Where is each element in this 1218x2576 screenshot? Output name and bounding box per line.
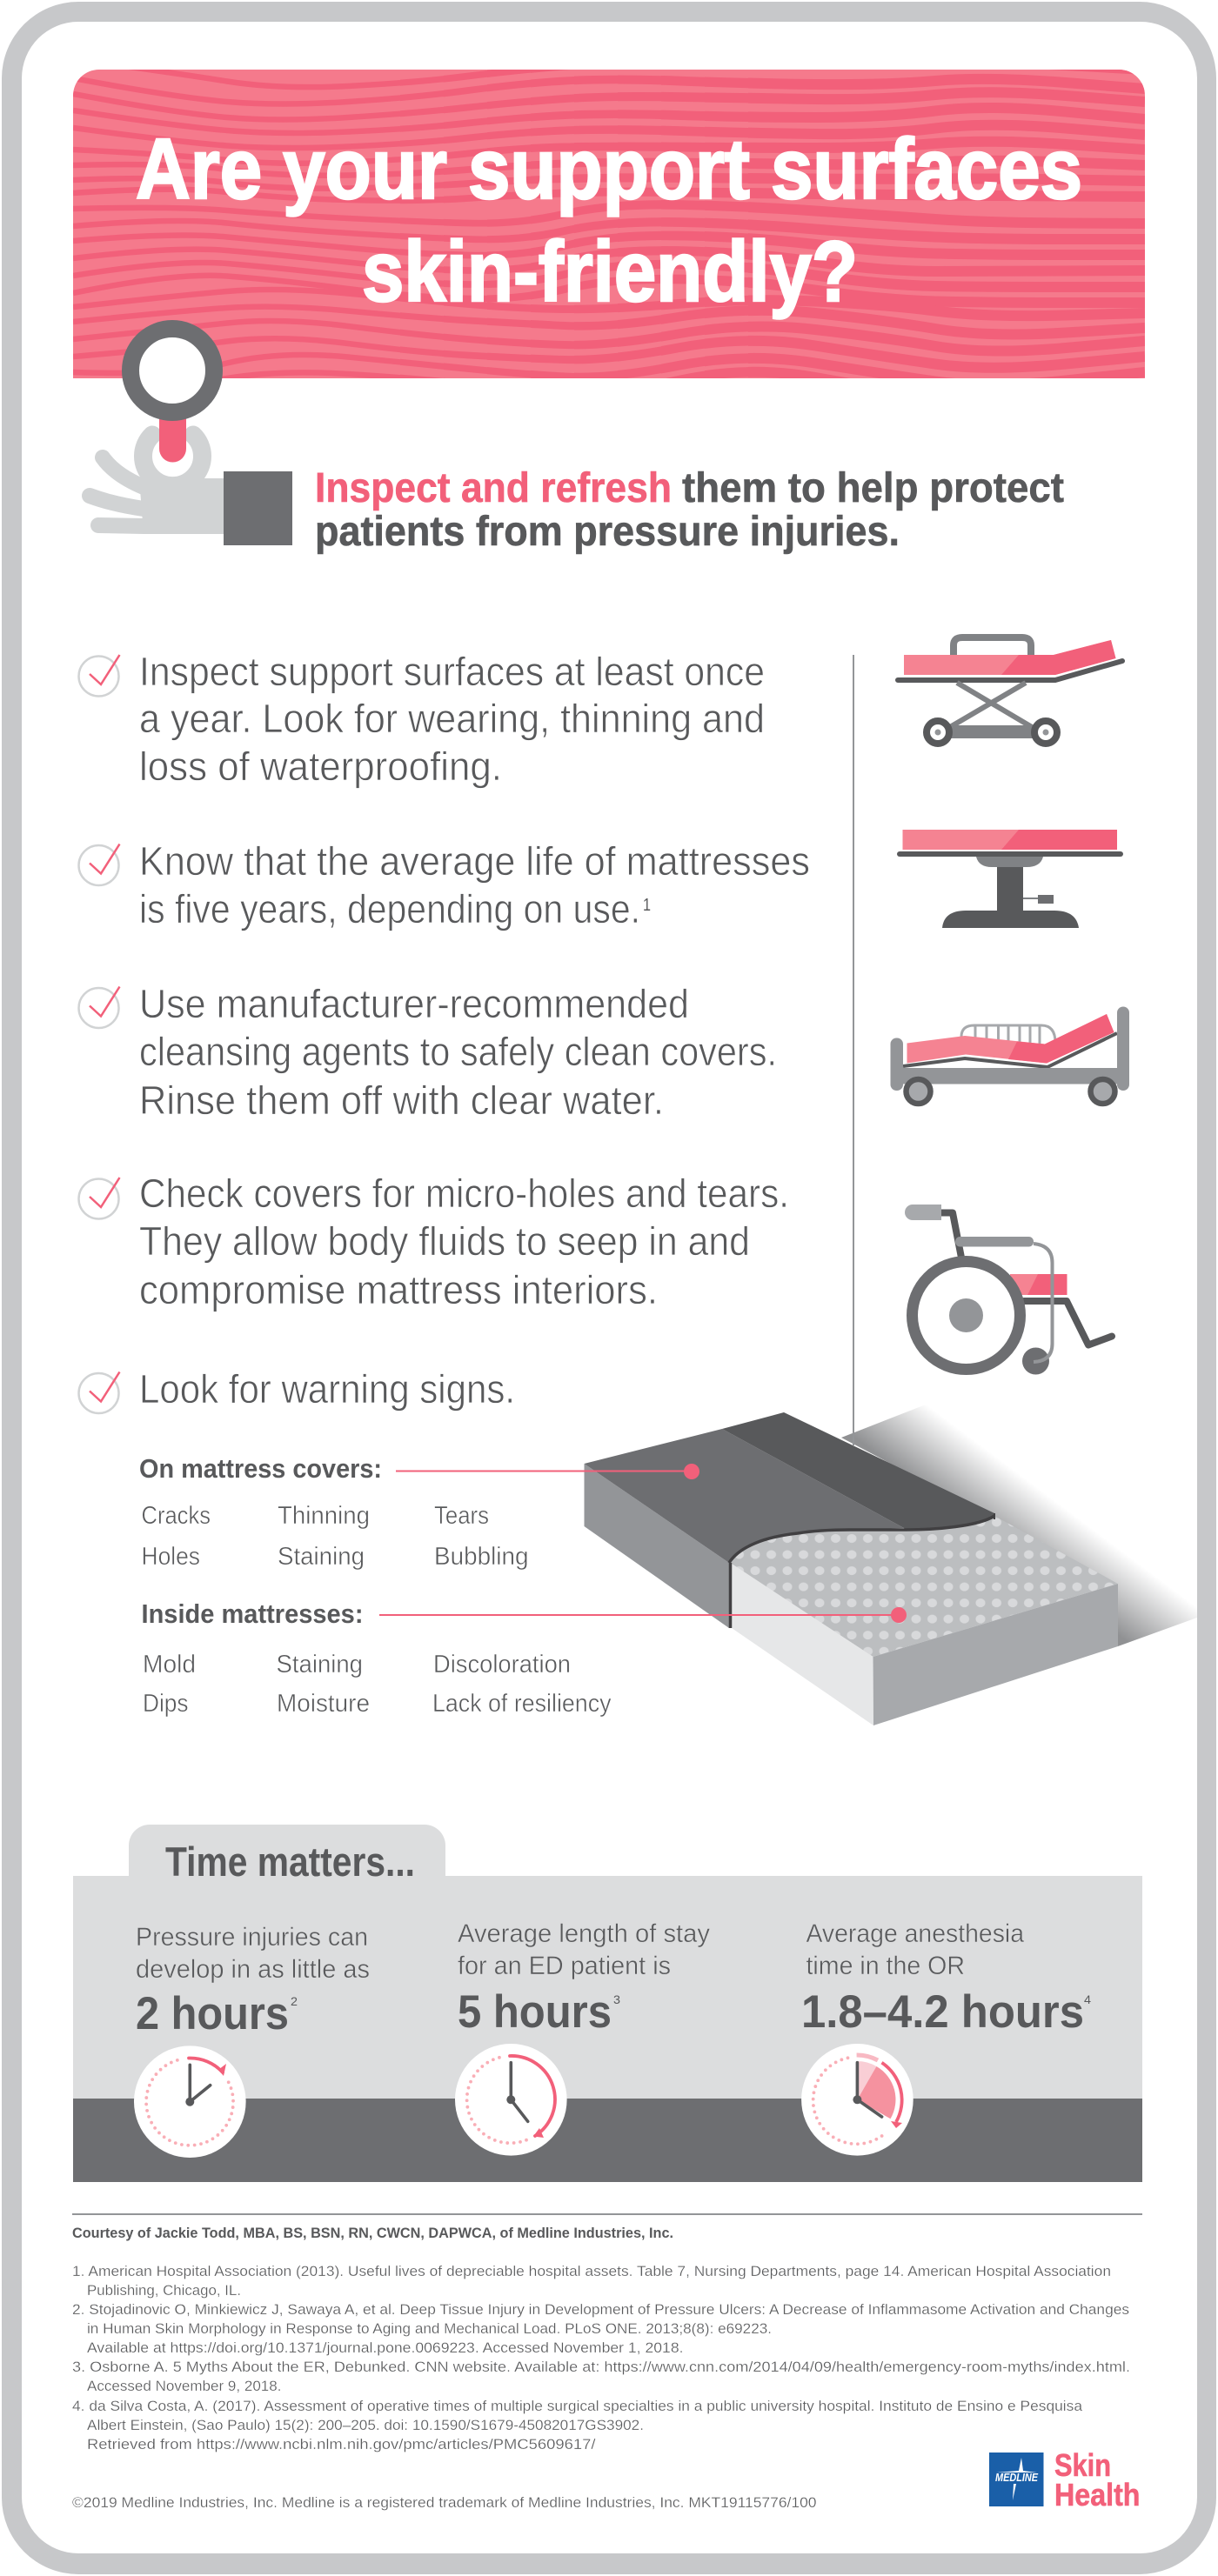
icon: hospital bed bbox=[891, 1007, 1129, 1104]
stat: 2 hours bbox=[136, 1923, 370, 2039]
icon: wheelchair bbox=[905, 1205, 1112, 1374]
stat: 1.8-4.2 hours: time in the OR bbox=[806, 1952, 965, 1980]
callout: on mattress covers: Staining bbox=[278, 1543, 365, 1571]
checklist item 2: is five years, depending on use. bbox=[139, 886, 640, 931]
callout: on mattress covers: Cracks bbox=[141, 1502, 211, 1530]
logo: Medline bbox=[989, 2453, 1044, 2506]
copyright: ©2019 Medline Industries, Inc. Medline is a registered trademark of Medline Industries, Inc. MKT19115776/100 bbox=[72, 2494, 816, 2511]
checklist item 4: Check covers for micro-holes and tears. bbox=[139, 1171, 789, 1216]
references: 4. da Silva Costa, A. (2017). Assessment of operative times of multiple surgical specialties in a public university hospital. Instituto de Ensino e Pesquisa bbox=[72, 2398, 1083, 2414]
heading: time matters: Time matters... bbox=[165, 1839, 415, 1885]
divider above references bbox=[72, 2213, 1142, 2215]
callout: inside mattresses: Moisture bbox=[277, 1690, 370, 1718]
callout: inside mattresses: Discoloration bbox=[433, 1651, 571, 1678]
callout: inside mattresses: Mold bbox=[143, 1651, 196, 1678]
references: in Human Skin Morphology in Response to Aging and Mechanical Load. PLoS ONE. 2013;8(8): e69223. bbox=[87, 2320, 772, 2337]
stat: 1.8-4.2 hours: 1.8–4.2 hours bbox=[801, 1986, 1084, 2038]
references: 1. American Hospital Association (2013). Useful lives of depreciable hospital assets. Table 7, Nursing Departments, page 14. American Hospital Association bbox=[72, 2263, 1111, 2279]
checklist item 2: 1 bbox=[643, 896, 651, 915]
references bbox=[72, 2263, 1130, 2453]
icon: clock 5 hours bbox=[455, 2044, 567, 2156]
courtesy line: Courtesy of Jackie Todd, MBA, BS, BSN, RN, CWCN, DAPWCA, of Medline Industries, Inc. bbox=[72, 2225, 673, 2241]
mattress illustration bbox=[585, 1405, 1197, 1725]
vertical divider line bbox=[853, 655, 854, 1445]
checklist item 3: cleansing agents to safely clean covers. bbox=[139, 1029, 777, 1074]
checklist item 1: a year. Look for wearing, thinning and bbox=[139, 696, 765, 741]
references: Albert Einstein, (Sao Paulo) 15(2): 200–205. doi: 10.1590/S1679-45082017GS3902. bbox=[87, 2417, 644, 2433]
stat: 2 hours: 2 bbox=[291, 1994, 298, 2008]
title: skin-friendly? bbox=[362, 224, 858, 319]
logo: Skin Health bbox=[1054, 2447, 1140, 2513]
icon: clock 2 hours bbox=[134, 2045, 246, 2158]
checklist item 4: They allow body fluids to seep in and bbox=[139, 1218, 750, 1264]
checklist item 4: compromise mattress interiors. bbox=[139, 1267, 658, 1312]
logo: Medline: MEDLINE bbox=[995, 2471, 1038, 2484]
callout: on mattress covers: Holes bbox=[141, 1543, 200, 1571]
icon: stretcher bbox=[898, 637, 1122, 744]
checklist item 3: Use manufacturer-recommended bbox=[139, 981, 689, 1026]
stat: 5 hours: Average length of stay bbox=[458, 1919, 710, 1948]
icon: hand holding magnifying glass bbox=[90, 329, 292, 545]
stat: 5 hours: for an ED patient is bbox=[458, 1952, 671, 1980]
stat: 5 hours bbox=[458, 1919, 710, 2038]
callout: inside mattresses: Inside mattresses: bbox=[141, 1598, 364, 1629]
callout: inside mattresses: Lack of resiliency bbox=[432, 1690, 612, 1718]
logo: Skin Health: Skin bbox=[1054, 2447, 1111, 2483]
stat: 1.8-4.2 hours: 4 bbox=[1084, 1992, 1091, 2006]
title banner bbox=[73, 70, 1145, 378]
icon: surgical table bbox=[900, 830, 1121, 928]
stat: 5 hours: 5 hours bbox=[458, 1986, 612, 2038]
callout: on mattress covers: Thinning bbox=[278, 1502, 370, 1530]
callout: inside mattresses: Staining bbox=[277, 1651, 363, 1678]
checklist item 1: Inspect support surfaces at least once bbox=[139, 649, 765, 694]
callout: on mattress covers bbox=[139, 1453, 699, 1571]
checklist item 2 bbox=[78, 838, 810, 931]
logo: Skin Health: Health bbox=[1054, 2477, 1140, 2513]
callout: on mattress covers: On mattress covers: bbox=[139, 1453, 382, 1484]
callout: inside mattresses: Dips bbox=[143, 1690, 188, 1718]
stat: 2 hours: 2 hours bbox=[136, 1988, 289, 2039]
checklist item 3: Rinse them off with clear water. bbox=[139, 1078, 664, 1123]
checklist item 5: Look for warning signs. bbox=[139, 1366, 515, 1411]
checklist item 1 bbox=[78, 649, 765, 789]
title: Are your support surfaces bbox=[136, 121, 1082, 217]
callout: on mattress covers: Bubbling bbox=[434, 1543, 529, 1571]
stat: 1.8-4.2 hours: Average anesthesia bbox=[806, 1919, 1024, 1948]
icon: clock 1.8-4.2 hours bbox=[801, 2044, 914, 2156]
references: Retrieved from https://www.ncbi.nlm.nih.gov/pmc/articles/PMC5609617/ bbox=[87, 2436, 596, 2453]
subheading: Inspect and refresh bbox=[315, 465, 672, 511]
checklist item 3 bbox=[78, 981, 777, 1123]
references: Publishing, Chicago, IL. bbox=[87, 2282, 241, 2299]
callout: on mattress covers: Tears bbox=[434, 1502, 489, 1530]
references: 3. Osborne A. 5 Myths About the ER, Debunked. CNN website. Available at: https://www.cnn.com/2014/04/09/health/emergency-room-myths/index.html. bbox=[72, 2359, 1130, 2375]
checklist item 2: Know that the average life of mattresses bbox=[139, 838, 810, 884]
subheading bbox=[315, 465, 1064, 555]
subheading: patients from pressure injuries. bbox=[315, 509, 900, 555]
panel: time matters bbox=[73, 1825, 1142, 2182]
references: 2. Stojadinovic O, Minkiewicz J, Sawaya A, et al. Deep Tissue Injury in Development of Pressure Ulcers: A Decrease of Inflammasome Activation and Changes bbox=[72, 2301, 1129, 2318]
checklist item 1: loss of waterproofing. bbox=[139, 744, 502, 789]
callout: inside mattresses bbox=[141, 1598, 907, 1718]
references: Available at https://doi.org/10.1371/journal.pone.0069223. Accessed November 1, 2018. bbox=[87, 2339, 683, 2356]
checklist item 4 bbox=[78, 1171, 789, 1312]
stat: 2 hours: Pressure injuries can bbox=[136, 1923, 368, 1952]
stat: 5 hours: 3 bbox=[613, 1992, 620, 2006]
references: Accessed November 9, 2018. bbox=[87, 2378, 282, 2394]
stat: 1.8-4.2 hours bbox=[801, 1919, 1091, 2038]
title bbox=[136, 121, 1082, 319]
stat: 2 hours: develop in as little as bbox=[136, 1955, 370, 1984]
subheading: them to help protect bbox=[682, 465, 1064, 511]
